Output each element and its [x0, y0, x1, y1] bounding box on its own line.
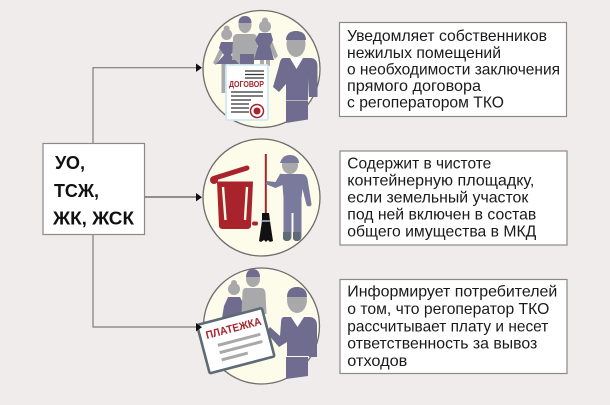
main figure — [273, 31, 318, 123]
text box 3: рассчитывает плату и несет — [347, 318, 549, 335]
payment slip: ПЛАТЕЖКА — [205, 316, 263, 342]
source box: УО, ТСЖ, ЖК, ЖСК: ЖК, ЖСК — [52, 208, 135, 228]
source box: УО, ТСЖ, ЖК, ЖСК — [43, 144, 144, 234]
background woman — [222, 280, 246, 318]
text box 3: ответственность за вывоз — [347, 336, 537, 353]
text box 3: о том, что регоператор ТКО — [347, 301, 549, 318]
connector arrows — [93, 64, 202, 331]
text box 2: под ней включен в состав — [347, 207, 536, 224]
text box 3: отходов — [347, 353, 407, 370]
document: договор: ДОГОВОР — [229, 79, 264, 89]
text box 1: с регоператором ТКО — [347, 94, 504, 112]
broom — [259, 154, 273, 242]
text box 2: контейнерную площадку, — [347, 173, 534, 190]
text box 1: прямого договора — [347, 78, 481, 95]
text box 1: нежилых помещений — [347, 45, 501, 62]
source box: УО, ТСЖ, ЖК, ЖСК: УО, — [55, 153, 85, 173]
woman right — [254, 18, 278, 66]
background man — [242, 269, 266, 314]
text box 3 — [340, 280, 567, 374]
trash bin — [210, 168, 258, 229]
woman left — [213, 26, 241, 93]
worker — [266, 155, 312, 241]
man centre — [232, 16, 258, 68]
source box: УО, ТСЖ, ЖК, ЖСК: ТСЖ, — [54, 181, 99, 201]
main figure — [266, 287, 317, 379]
text box 3: Информирует потребителей — [347, 284, 557, 301]
text box 2: если земельный участок — [347, 190, 529, 207]
text box 1: Уведомляет собственников — [347, 28, 547, 45]
icon: contract circle — [203, 10, 320, 128]
text box 2: общего имущества в МКД — [347, 224, 536, 241]
text box 2: Содержит в чистоте — [347, 156, 491, 173]
text box 1 — [340, 22, 566, 116]
icon: payment circle — [197, 268, 320, 384]
text box 2 — [340, 151, 567, 245]
icon: bin and cleaner circle — [203, 139, 320, 256]
text box 1: о необходимости заключения — [347, 62, 560, 78]
